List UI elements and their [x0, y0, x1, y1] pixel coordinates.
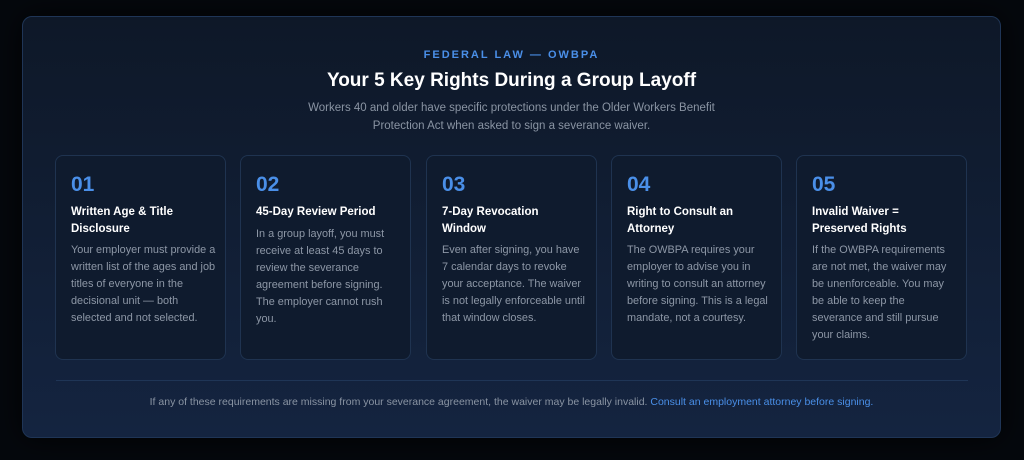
card 01: 01: [71, 173, 94, 196]
card 03: [426, 155, 597, 360]
card 04: The OWBPA requires your: [627, 244, 755, 256]
card 04: mandate, not a courtesy.: [627, 312, 746, 324]
card 05: If the OWBPA requirements: [812, 244, 945, 256]
subtitle: Protection Act when asked to sign a severance waiver.: [373, 120, 650, 132]
card 02: In a group layoff, you must: [256, 228, 384, 240]
card 03: Window: [442, 222, 486, 234]
card 05: [796, 155, 967, 360]
card 01: titles of everyone in the: [71, 278, 183, 290]
card 01: Written Age & Title: [71, 206, 173, 218]
card 04: [611, 155, 782, 360]
card 03: 7 calendar days to revoke: [442, 261, 567, 273]
card 02: receive at least 45 days to: [256, 244, 383, 256]
footer note: If any of these requirements are missing from your severance agreement, the waiver may be legally invalid. Consult an employment attorney before signing.: [150, 396, 873, 408]
card 05: Preserved Rights: [812, 222, 907, 234]
card 04: employer to advise you in: [627, 261, 750, 273]
card 02: you.: [256, 312, 277, 324]
card 05: Invalid Waiver =: [812, 206, 899, 218]
card 03: is not legally enforceable until: [442, 295, 585, 307]
card 03: Even after signing, you have: [442, 244, 579, 256]
card 02: 45-Day Review Period: [256, 206, 376, 218]
card 02: review the severance: [256, 262, 359, 274]
card 04: Right to Consult an: [627, 206, 733, 218]
card 02: [240, 155, 411, 360]
card 01: Your employer must provide a: [71, 244, 215, 256]
card 01: written list of the ages and job: [71, 261, 215, 273]
title: Your 5 Key Rights During a Group Layoff: [327, 70, 696, 91]
eyebrow label: FEDERAL LAW — OWBPA: [424, 49, 599, 61]
card 05: be unenforceable. You may: [812, 278, 944, 290]
card 01: [55, 155, 226, 360]
card 05: severance and still pursue: [812, 312, 939, 324]
card 04: Attorney: [627, 222, 674, 234]
card 03: that window closes.: [442, 312, 536, 324]
card 04: before signing. This is a legal: [627, 295, 768, 307]
card 05: 05: [812, 173, 835, 196]
card 04: writing to consult an attorney: [627, 278, 766, 290]
card 05: be able to keep the: [812, 295, 905, 307]
card 02: 02: [256, 173, 279, 196]
card 04: 04: [627, 173, 650, 196]
card 02: agreement before signing.: [256, 278, 383, 290]
card 05: are not met, the waiver may: [812, 261, 946, 273]
subtitle: [308, 102, 715, 132]
card 02: The employer cannot rush: [256, 296, 383, 308]
card 03: 7-Day Revocation: [442, 206, 539, 218]
card 03: 03: [442, 173, 465, 196]
card 01: selected and not selected.: [71, 312, 198, 324]
card 01: decisional unit — both: [71, 295, 178, 307]
card 01: Disclosure: [71, 222, 130, 234]
subtitle: Workers 40 and older have specific protections under the Older Workers Benefit: [308, 102, 715, 114]
card 05: your claims.: [812, 329, 870, 341]
card 03: your acceptance. The waiver: [442, 278, 581, 290]
